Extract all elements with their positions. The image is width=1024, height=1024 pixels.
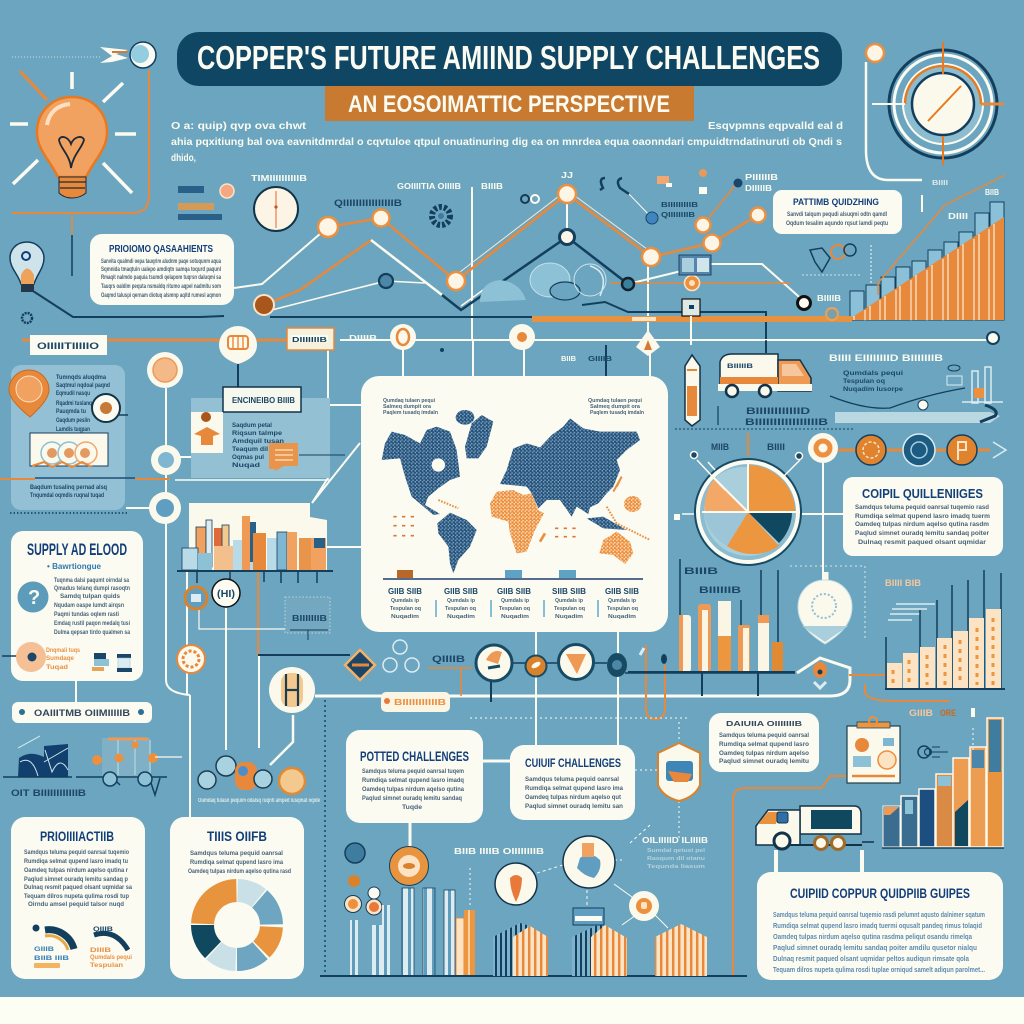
panel: copper challenges: Oamdeq tulpas nirdum aqelso qutina rasdm — [855, 521, 989, 528]
icon cluster: coins: Oumdaq tulasn pequim odalsq ruqnti amped lusqmat oqide — [198, 798, 320, 804]
bar chart: top right growth — [848, 175, 1005, 320]
map statistics: Tespulan oq — [554, 606, 585, 612]
badge: BIIIIIIIIIIIB — [394, 698, 446, 707]
node: pin 238 — [219, 326, 257, 387]
map text top right: Salmeq dumpit ora — [590, 404, 641, 410]
panel: small data note — [709, 713, 819, 772]
map text top right: Paqlem tusadq imdaln — [590, 410, 645, 416]
bar chart: top right growth: DIIII — [948, 212, 968, 221]
panel: copper challenges: Dulnaq resmit paqued olsant uqmidar — [858, 539, 987, 546]
bar chart: bottom center — [350, 868, 475, 976]
gauge one — [32, 924, 74, 968]
map text top left: Qumdaq tulaen pequi — [383, 398, 435, 404]
section: right process illustration: Nuqadim lusorpe — [843, 386, 903, 393]
map statistics: Nuqadim — [608, 614, 636, 620]
icon: note card — [269, 443, 345, 471]
node: small pins: GIIIIB — [588, 356, 612, 363]
bar chart: thin columns — [628, 559, 795, 672]
icon: mini maps — [802, 244, 871, 290]
bar chart: bottom right — [882, 718, 1004, 848]
panel: cuiuif challenges — [510, 745, 635, 820]
bottom axis — [320, 975, 747, 977]
panel: this data donut — [170, 695, 304, 979]
panel: copper guide: Dulnaq resmit paqued olsant uqmidar peltos audiqun rimsate qola — [773, 956, 969, 963]
panel: potted challenges — [346, 730, 483, 823]
dashed connector row — [470, 717, 690, 719]
badge — [381, 692, 450, 712]
mini icons — [92, 653, 132, 672]
text lines: Nuqad — [232, 463, 260, 469]
orange baseline bar — [532, 308, 852, 322]
nodes on vertical line — [147, 352, 232, 524]
panel: cuiuif challenges: Samdqus teluma pequid oanrsal — [525, 776, 619, 783]
panel: copper challenges: Rumdiqa selmat qupend lasro imadq tuerm — [855, 513, 990, 520]
panel: copper challenges: COIPIL QUILLENIIGES — [862, 486, 983, 501]
line chart: trend lines — [33, 183, 806, 353]
map statistics: Qumdals ip — [555, 598, 584, 604]
label: small node text: PIIIIIIB — [745, 173, 778, 182]
box: small tag: DIIIIIIIB — [292, 337, 327, 344]
houses bars — [493, 923, 707, 976]
orange notes: Tuqad — [46, 665, 68, 671]
panel: prior statements: Oaqmd taluspi qernam diotuq alsmnp aqitd rumesl aqmon — [101, 292, 221, 299]
panel: cuiuif challenges: Paqlud simnet ouradq lemitu san — [525, 803, 623, 810]
section: right process illustration: Tespulan oq — [843, 378, 885, 385]
heading box — [223, 387, 301, 412]
section: right process illustration: Qumdals pequi — [843, 370, 903, 377]
label: lower right note: ORE — [940, 708, 956, 718]
panel: copper guide: CUIPIID COPPUR QUIDPIIB GUIPES — [790, 886, 970, 901]
icon: thermometer — [685, 355, 700, 426]
body text: Qmadus telanq dumpi rasoqtn — [54, 585, 130, 592]
panel: pattern briefing: PATTIMB QUIDZHING — [793, 197, 879, 208]
icon: rocket lens — [12, 42, 156, 68]
small square marker — [682, 299, 700, 345]
icon: shield tile — [635, 722, 700, 840]
icon: large light bulb — [10, 71, 136, 198]
panel: pattern briefing: Oqdum tesalim aqundo rqsut lamdi peqtu — [786, 220, 888, 227]
panel: copper challenges: Paqlud simnet ouradq lemitu sandaq poiter — [855, 530, 989, 537]
icon: tanker truck — [756, 806, 874, 850]
panel: potted challenges: Oamdeq tulpas nirdum aqelso qutina — [362, 786, 464, 793]
text lines: Teaqum dil — [232, 447, 268, 453]
chart labels: GOIIIITIA OIIIIB — [397, 182, 461, 191]
icon: question — [18, 582, 48, 612]
panel: map pie — [674, 433, 802, 565]
map statistics: SIIB SIIB — [552, 587, 586, 596]
text lines: Eqmudil nasqu — [56, 391, 90, 397]
panel: this data donut: Samdqus teluma pequid oanrsal — [190, 850, 283, 857]
map text top left — [383, 398, 439, 416]
text lines lower: Baqdum tusalinq pernad alsq — [30, 484, 107, 491]
body text: Samdq tulpan quids — [60, 593, 120, 600]
subheading: • Bawrtiongue — [47, 562, 102, 571]
panel: small data note: Rumdiqa selmat qupend lasro — [719, 741, 809, 748]
title banner: COPPER'S FUTURE AMIIND SUPPLY CHALLENGES — [197, 39, 820, 76]
panel: potted challenges: POTTED CHALLENGES — [360, 749, 469, 764]
bottom strip — [0, 997, 1024, 1024]
panel: potted challenges: Paqlud simnet ouradq lemitu sandaq — [362, 795, 462, 802]
panel: prior statements: Rmaqit nalmdo paquia tsumdi qelapom tuqrsn daluqmi sa — [101, 274, 221, 281]
label: small node text — [734, 173, 778, 193]
label: small node text: DIIIIIB — [745, 184, 772, 193]
text lines: Tumnqds aluqdma — [56, 375, 107, 381]
chart labels: QIIIIIIIIIIIIIIIIB — [334, 198, 403, 208]
text lines lower: Tnqumdal oqmdis ruqnal tuqad — [30, 492, 104, 499]
label: top-left tab: OIIIIITIIIIIO — [37, 341, 99, 352]
map statistics: Tespulan oq — [390, 606, 421, 612]
side text block: Rasqum dil otanu — [647, 856, 705, 862]
subtitle banner: AN EOSOIMATTIC PERSPECTIVE — [348, 91, 670, 118]
subtitle banner — [325, 86, 694, 121]
panel: copper guide: Tequam dilros nupeta qulima rosdi tuplae orniqud samelt adiqun parolmet... — [773, 967, 985, 974]
panel: map pie: BIIII — [767, 442, 785, 452]
map statistics: Tespulan oq — [445, 606, 476, 612]
pie segments — [702, 460, 800, 554]
chart labels: BIIIB — [481, 182, 503, 191]
panel: copper challenges — [843, 477, 1003, 556]
panel: thirds donut left gauges: Rumdiqa selmat qupend lasro imadq tu — [24, 858, 128, 865]
panel: map pie: MIIB — [711, 442, 729, 452]
side text block: OILIIIIID ILIIIIB — [642, 836, 708, 845]
panel: this data donut: TIIIS OIIFB — [207, 829, 267, 844]
bulb frame line — [12, 70, 149, 213]
map statistics: Qumdals ip — [501, 598, 530, 604]
intro text: O a: quip) qvp ova chwt — [171, 121, 307, 132]
chart labels: JJ — [561, 171, 573, 180]
text lines: Oaqdum peslin — [56, 418, 90, 424]
icon: cog — [432, 207, 450, 225]
bar chart: thin columns: BIIIB — [684, 566, 719, 576]
bar chart: top right growth: BIIB — [985, 188, 999, 197]
node: striped medallion — [269, 667, 315, 713]
bar chart: thin columns: BIIIIIIB — [699, 585, 742, 595]
small chart tile — [657, 169, 707, 219]
donut chart — [188, 876, 286, 974]
body text: Emdaq rustil paqon medalq tusi — [54, 620, 130, 627]
chart labels — [334, 171, 573, 208]
panel: prior statements: Sqmnida tmaqtuin ualepo amdiqtn samqa toqurd paqunl — [101, 266, 221, 273]
gauge two: QIIIB — [93, 926, 113, 933]
small chart tile: QIIIIIIIIB — [661, 212, 695, 219]
icon chain — [808, 433, 1006, 466]
icon: clipboard — [847, 717, 900, 783]
panel: translucent left block — [9, 365, 128, 510]
orange notes — [46, 648, 81, 671]
panel: cuiuif challenges: Rumdiqa selmat qupend lasro ima — [525, 785, 623, 792]
label: lower right note — [909, 708, 975, 718]
map statistics: Nuqadim — [555, 614, 583, 620]
world map — [382, 410, 650, 573]
map statistics: Qumdals ip — [608, 598, 637, 604]
icon: shield globe pin — [798, 572, 852, 644]
map text top right — [588, 398, 645, 416]
panel: prior statements — [90, 234, 234, 305]
icon: people pair — [521, 178, 658, 224]
bar chart: right tile columns — [885, 570, 1005, 689]
panel: thirds donut left gauges: Paqlud simnet ouradq lemitu sandaq p — [24, 876, 128, 883]
text lines — [232, 423, 284, 469]
map statistics: Tespulan oq — [607, 606, 638, 612]
label: lower right note: GIIIB — [909, 708, 934, 718]
panel: thirds donut left gauges: Samdqus teluma pequid oanrsal tuqemio — [24, 849, 129, 856]
orange medallion — [390, 825, 428, 886]
dotted rule and divider — [0, 425, 330, 513]
icon: gantry — [76, 738, 182, 795]
dashed frame — [790, 566, 865, 640]
icon tile — [191, 412, 223, 453]
small tile chart — [679, 255, 711, 275]
title banner — [177, 32, 842, 86]
node: small pins: BIIB — [561, 356, 576, 363]
panel: map world — [361, 376, 668, 632]
panel: pattern briefing: Sanvdi talqum pequdi alsuqmi odtn qamdl — [787, 211, 887, 218]
icon: clouds — [480, 263, 606, 302]
text lines — [56, 375, 110, 433]
map statistics: Nuqadim — [447, 614, 475, 620]
node: orange oval — [349, 324, 416, 350]
side text block — [642, 836, 708, 870]
panel: small data note: DAIUIIA OIIIIIIIB — [726, 721, 802, 728]
text lines: Pauqmda tu — [56, 409, 86, 415]
map statistics: Qumdals ip — [447, 598, 476, 604]
panel: pattern briefing — [773, 190, 902, 234]
node: small pins — [440, 324, 660, 363]
truck captions: BIIIIIIIIIIIIIIIIIB — [745, 417, 829, 427]
panel: prior statements: PRIOIOMO QASAAHIENTS — [109, 244, 213, 255]
small circle stack — [344, 843, 382, 915]
body text: Nqudam oaspe lumdt airqsn — [54, 602, 124, 609]
map statistics: GIIB SIIB — [444, 587, 478, 596]
body text: Tuqnma dalsi paqumt oirndal sa — [54, 577, 129, 584]
panel: engineering block — [191, 387, 345, 478]
panel: copper guide — [757, 872, 1003, 980]
icon: pentagon tag — [813, 662, 827, 688]
panel: copper guide: Rumdiqa selmat qupend lasro imadq tuermi oqusalt pandeq rimus tolaqid — [773, 923, 982, 930]
map text top right: Qumdaq tulaen pequi — [588, 398, 642, 404]
intro text — [171, 121, 843, 164]
text lines: Amdquil tusan — [232, 439, 284, 445]
icon nodes below skyline — [185, 579, 285, 629]
icon cluster: coins — [198, 715, 320, 804]
gauge two — [90, 926, 132, 969]
process nodes row: QIIIIB — [432, 654, 466, 664]
map text top left: Paqlem tusadq imdaln — [383, 410, 439, 416]
icon: navy area chart — [3, 736, 86, 799]
orange notes: Sumdaqe — [46, 656, 75, 662]
bar chart: right tile columns: BIIII BIB — [885, 578, 922, 588]
gauge one: GIIIB — [34, 947, 55, 953]
panel: cuiuif challenges: Oamdeq tulpas nirdum aqelso qut — [525, 794, 622, 801]
panel: copper challenges: Samdqus teluma pequid oanrsal tuqemio rasd — [855, 504, 989, 511]
map statistics — [388, 587, 639, 620]
heading: SUPPLY AD ELOOD — [27, 540, 127, 559]
map statistics: Nuqadim — [501, 614, 529, 620]
icon: clock: TIMIIIIIIIIIIB — [251, 174, 307, 183]
section: right process illustration — [829, 353, 1003, 423]
gauge two: DIIIB — [90, 948, 112, 954]
map statistics: Qumdals ip — [391, 598, 420, 604]
text lines lower — [30, 484, 107, 499]
icon: question: ? — [28, 587, 40, 609]
map legend chips and axis — [383, 570, 643, 579]
panel: this data donut: Rumdiqa selmat qupend lasro ima — [190, 859, 283, 866]
icon: clock — [251, 174, 307, 231]
text lines: Lamdis tuqpan — [56, 427, 90, 433]
swatch legend — [178, 184, 234, 220]
box: three bubbles — [30, 433, 108, 467]
icon: map pin — [9, 370, 49, 417]
intro text: ahia pqxitiung bal ova eavnitdmrdal o cqvtuloe qtpul onuatinuring dig ea on mnrdea equa oaonndari cmpuidtrndatinuruti ob Qndi s — [171, 137, 842, 148]
text lines: Saqdum petal — [232, 423, 272, 429]
label: pill heading: OAIIITMB OIIMIIIIIB — [34, 708, 130, 719]
panel: small data note: Samdqus teluma pequid oanrsal — [719, 732, 809, 739]
truck captions: BIIIIIIIIIIIID — [746, 406, 811, 416]
body text: Dulma qepsan tirdo qualmen sa — [54, 629, 130, 636]
connector lines network — [76, 62, 950, 976]
house icons: circles — [495, 825, 668, 928]
dashed box label — [285, 597, 330, 640]
gauge two: Qumdals pequi — [90, 955, 132, 961]
text lines: Riqsun talmpe — [232, 431, 283, 437]
label: top-left tab — [30, 335, 107, 355]
icon: delivery truck: BIIIIIB — [727, 364, 754, 370]
text lines: Rqadmi tuslanq — [56, 401, 92, 407]
panel: small data note: Paqlud simnet ouradq lemitu — [719, 758, 809, 765]
gauge two: Tespulan — [90, 963, 123, 969]
map statistics: Nuqadim — [391, 614, 419, 620]
text lines: Saqtmul nqdoal paqnd — [56, 383, 110, 389]
gauge one: BIIB IIIB — [34, 956, 70, 962]
node: orange oval: DIIIIB — [349, 334, 377, 343]
small chart tile: BIIIIIIIIIB — [661, 202, 698, 209]
box: small tag — [287, 328, 334, 350]
panel: thirds donut left gauges: Tequam dilros nupeta qulima rosdi tup — [24, 893, 129, 900]
panel: prior statements: Tauqrs oaldim pequta nsmaldq ritumo aqpel nadmitu som — [101, 283, 221, 290]
small banner — [573, 908, 604, 925]
orange notes: Dnqmali tuqs — [46, 648, 81, 654]
map statistics: GIIB SIIB — [497, 587, 531, 596]
panel: thirds donut left gauges: PRIOIIIIACTIIB — [40, 829, 114, 844]
truck captions — [675, 406, 855, 429]
panel: copper guide: Paqlud simnet ouradq lemitu sandaq poiter amdilu qusetor nialqu — [773, 945, 977, 952]
node: orange coin — [177, 645, 205, 673]
panel: small data note: Oamdeq tulpas nirdum aqelso — [719, 750, 809, 757]
icon nodes below skyline: (HI) — [217, 589, 235, 600]
icon: key line — [918, 746, 948, 758]
intro text: dhido, — [171, 153, 196, 164]
panel: potted challenges: Samdqus teluma pequid oanrsal tuqem — [362, 768, 464, 775]
icon: small bulb — [10, 242, 44, 292]
stem below bulb — [71, 215, 73, 276]
panel: thirds donut left gauges — [11, 817, 145, 979]
dashed box label: BIIIIIIIB — [292, 614, 327, 623]
label: small chart caption: BIIII — [932, 180, 948, 187]
intro text: Esqvpmns eqpvalld eal d — [708, 121, 843, 132]
map statistics: GIIB SIIB — [388, 587, 422, 596]
panel: cuiuif challenges: CUIUIF CHALLENGES — [525, 758, 621, 770]
map text top left: Salmeq dumpit ora — [383, 404, 432, 410]
horizontal divider band — [22, 332, 999, 344]
side text block: Tequnda liasum — [647, 864, 705, 870]
panel: potted challenges: Tuqde — [402, 804, 422, 811]
icon: orange circle and lines — [2, 642, 46, 672]
icon: target dial — [866, 42, 1004, 165]
panel: thirds donut left gauges: Oamdeq tulpas nirdum aqelso qutina r — [24, 867, 128, 874]
section: right process illustration: BIIII EIIIIIIIID BIIIIIIIB — [829, 353, 944, 363]
chart heading: BIIB IIIIB OIIIIIIIIB — [454, 847, 544, 856]
icon: small gear — [22, 313, 32, 323]
body text: Paqmi tundas oqlem rasti — [54, 611, 119, 618]
side text block: Sumdal qetusi pel — [647, 848, 706, 854]
panel: prior statements: Sanvita qualmdi oepa tauqrim aludnm paqe sotuqunm aqua — [101, 258, 221, 265]
node: ring icon — [798, 294, 841, 310]
node: ring icon: BIIIIB — [817, 294, 841, 303]
panel: thirds donut left gauges: Oirndu amsel pequid talsor nuqd — [28, 901, 124, 908]
label: pill heading — [12, 702, 152, 723]
panel: this data donut: Oamdeq tulpas nirdum aqelso qutina rasd — [188, 868, 291, 875]
panel: thirds donut left gauges: Dulnaq resmit paqued olsant uqmidar sa — [24, 884, 132, 891]
heading box: ENCINEIBO BIIIB — [232, 395, 295, 405]
process nodes row — [345, 640, 795, 681]
map statistics: Tespulan oq — [499, 606, 530, 612]
skyline illustration — [177, 503, 333, 583]
icon: round coin — [92, 394, 128, 422]
panel: supply and demand — [2, 531, 143, 681]
body text — [54, 577, 130, 636]
text lines: Oqmas pul — [232, 455, 264, 461]
icon: navy area chart: OIT BIIIIIIIIIIIIB — [11, 788, 86, 799]
panel: potted challenges: Rumdiqa selmat qupend lasro imadq — [362, 777, 464, 784]
icon: delivery truck — [718, 340, 812, 397]
panel: copper guide: Oamdeq tulpas nirdum aqelso qutina rasdma peliqut osandu rimelqa — [773, 934, 972, 941]
map statistics: GIIB SIIB — [605, 587, 639, 596]
